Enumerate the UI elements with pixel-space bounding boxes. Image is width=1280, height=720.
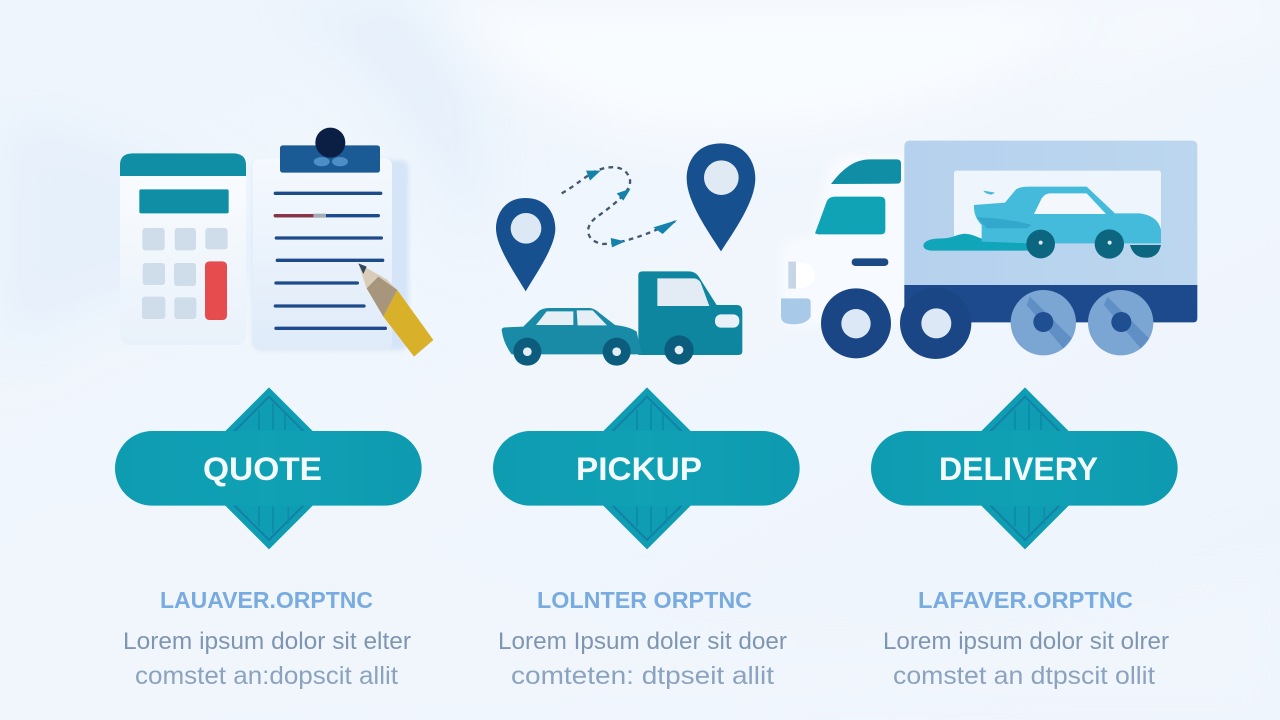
text block: delivery: LAFAVER.ORPTNC [918,587,1133,613]
wheels [821,288,1153,359]
text block: pickup: Lorem Ipsum doler sit doer [498,628,787,655]
panel: quote [115,128,433,690]
cab [781,153,907,327]
badge: delivery [871,387,1178,549]
text block: quote: Lorem ipsum dolor sit elter [123,628,411,655]
text block: delivery: comstet an dtpscit ollit [893,662,1155,690]
icon: car transporter truck [781,141,1197,359]
text block: pickup [498,587,787,690]
pin: destination [687,143,755,251]
badge: pickup [493,387,800,549]
text block: pickup: LOLNTER ORPTNC [537,587,752,613]
text block: quote: comstet an:dopscit allit [135,662,398,690]
clipboard [253,128,409,350]
route arrows [562,167,677,247]
transported car [923,187,1161,259]
icon: calculator and clipboard [120,128,433,357]
towed car [502,308,642,366]
text block: quote: LAUAVER.ORPTNC [160,587,373,613]
panel: delivery [781,141,1197,690]
text block: pickup: comteten: dtpseit allit [511,662,774,690]
label: quote: QUOTE [203,451,322,487]
cargo box [904,141,1197,322]
badge: quote [115,387,422,549]
pin: origin [496,198,555,291]
label: pickup: PICKUP [576,451,702,487]
icon: route and tow truck [496,143,755,366]
panel: pickup [493,143,800,690]
tow truck [638,271,742,365]
pencil [358,263,433,357]
text block: delivery: Lorem ipsum dolor sit olrer [883,628,1169,655]
calculator [120,153,246,345]
label: delivery: DELIVERY [939,451,1098,487]
text block: delivery [883,587,1169,690]
text block: quote [123,587,411,690]
